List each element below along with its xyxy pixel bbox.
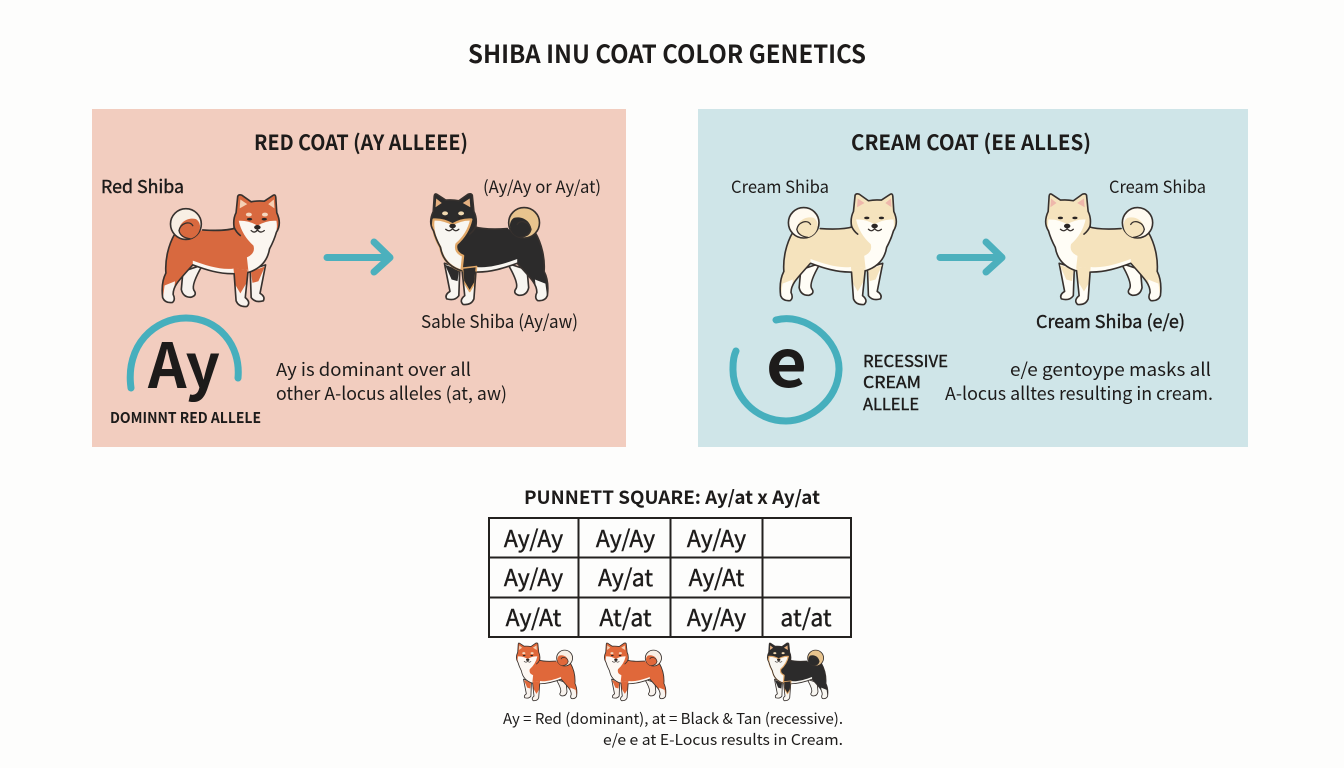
table: punnett square [489, 518, 851, 637]
icon: dominant allele Ay arc: Ay [147, 316, 220, 406]
table: punnett square: Ay/Ay [687, 599, 746, 633]
heading: cream coat: CREAM COAT (EE ALLES) [851, 127, 1091, 157]
table: punnett square: Ay/at [598, 559, 653, 593]
table: punnett square: at/at [780, 599, 832, 633]
arrow: cream to cream [940, 242, 1002, 272]
icon: small black and tan shiba [767, 643, 828, 701]
icon: recessive allele e ring: e [766, 311, 807, 407]
table: punnett square: Ay/Ay [504, 520, 563, 554]
text: dominance note [276, 356, 507, 406]
label: red shiba: Red Shiba [101, 173, 184, 199]
table: punnett square: Ay/At [506, 599, 562, 633]
icon: small red shiba 1 [516, 643, 577, 701]
heading: red coat: RED COAT (AY ALLEEE) [254, 127, 468, 157]
table: punnett square: Ay/Ay [687, 520, 746, 554]
text: masking note [945, 356, 1213, 406]
icon: cream shiba dog right [1046, 194, 1161, 305]
icon: red shiba dog [162, 195, 279, 307]
table: punnett square: Ay/Ay [504, 559, 563, 593]
label: recessive cream allele: ALLELE [863, 391, 919, 415]
icon: dominant allele Ay arc [130, 316, 238, 406]
label: dominant red allele: DOMINNT RED ALLELE [110, 407, 261, 428]
text: legend note: e/e e at E-Locus results in Cream. [603, 729, 843, 750]
table: punnett square: At/at [599, 599, 652, 633]
label: cream shiba left: Cream Shiba [731, 173, 829, 198]
icon: recessive allele e ring [733, 311, 839, 421]
label: cream shiba right: Cream Shiba [1109, 173, 1206, 198]
label: recessive cream allele: CREAM [863, 369, 921, 393]
text: masking note: e/e gentoype masks all [1010, 356, 1211, 382]
label: cream shiba genotype: Cream Shiba (e/e) [1036, 308, 1185, 334]
heading: punnett square: PUNNETT SQUARE: Ay/at x Ay/at [524, 484, 820, 510]
text: dominance note: other A-locus alleles (at, aw) [276, 380, 507, 406]
text: legend note: Ay = Red (dominant), at = Black & Tan (recessive). [503, 708, 843, 729]
table: punnett square: Ay/At [689, 559, 745, 593]
text: dominance note: Ay is dominant over all [276, 356, 471, 382]
table: punnett square: Ay/Ay [596, 520, 655, 554]
text: legend note [503, 708, 843, 750]
panel: red coat [92, 109, 626, 447]
label: genotype: (Ay/Ay or Ay/at) [483, 173, 601, 198]
icon: sable shiba dog [431, 194, 548, 305]
label: recessive cream allele: RECESSIVE [863, 348, 948, 372]
arrow: red to sable [327, 242, 390, 272]
label: recessive cream allele [863, 348, 948, 415]
title: SHIBA INU COAT COLOR GENETICS [468, 35, 866, 71]
panel: cream coat [698, 109, 1248, 447]
icon: small red shiba 2 [604, 643, 666, 701]
label: sable shiba: Sable Shiba (Ay/aw) [421, 308, 578, 334]
icon: cream shiba dog left [780, 194, 896, 305]
text: masking note: A-locus alltes resulting in cream. [945, 380, 1213, 406]
